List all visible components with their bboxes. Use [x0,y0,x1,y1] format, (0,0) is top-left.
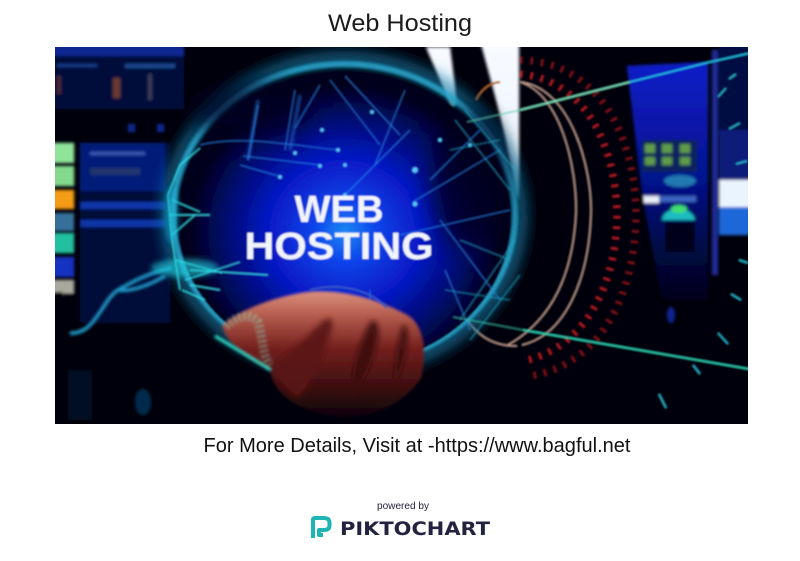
piktochart wordmark: PIKTOCHART [340,518,490,540]
cyan network burst left [168,148,268,300]
image caption text: WEB HOSTING [246,194,432,261]
network lines right side [445,110,520,340]
hand [215,287,424,418]
network lines [200,76,510,350]
left chart line [70,268,172,333]
hero image: web hosting globe on hand [55,47,748,424]
globe glow and sphere [151,59,520,371]
beige ring lines [467,82,591,346]
green beam lines [453,52,755,370]
powered by label: powered by [377,501,429,512]
image caption text: WEB HOSTING: HOSTING [244,226,434,268]
right tick marks [659,74,748,408]
piktochart logo [313,518,490,540]
right dashboard screens [627,45,754,323]
details link text: For More Details, Visit at -https://www.bagful.net [204,435,631,457]
icon: piktochart mark [313,518,330,538]
title: Web Hosting [328,10,472,37]
red radar dashes [520,60,636,376]
shirt collar stripes [426,40,519,200]
image caption text: WEB HOSTING: WEB [294,189,384,231]
left dashboard screen [50,42,184,420]
